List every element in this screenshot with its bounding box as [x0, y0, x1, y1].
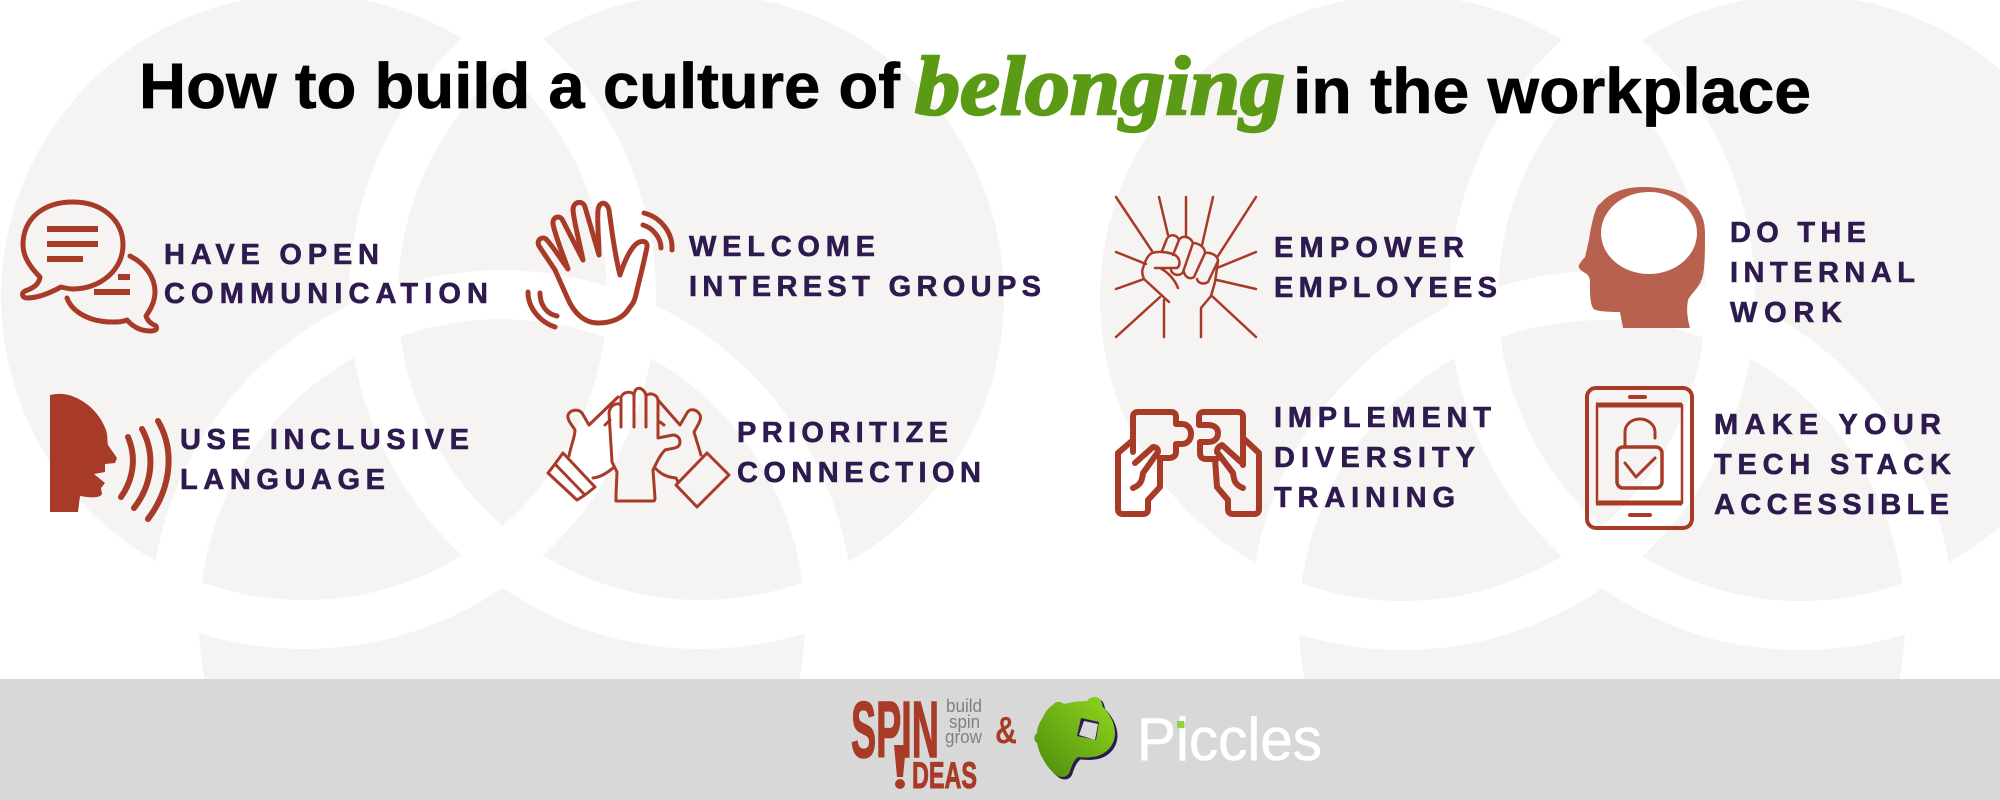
- label: [180, 424, 469, 496]
- label: LANGUAGE: [180, 464, 385, 496]
- icon: raised fist with rays: [1116, 197, 1256, 337]
- icon: speaking head: [50, 394, 169, 519]
- label: [164, 239, 488, 310]
- label: DO THE: [1730, 217, 1866, 249]
- label: INTEREST GROUPS: [689, 271, 1041, 303]
- label: [1730, 217, 1915, 329]
- label: [1714, 409, 1951, 521]
- icon: high five: [548, 388, 729, 507]
- label: USE INCLUSIVE: [180, 424, 469, 456]
- title: [139, 40, 1811, 133]
- item: make your tech stack accessible: [1587, 388, 1951, 528]
- footer band: [0, 679, 2000, 800]
- label: WELCOME: [689, 231, 875, 263]
- logo: Spin Ideas: DEAS: [912, 755, 977, 796]
- label: IMPLEMENT: [1274, 402, 1491, 434]
- item: implement diversity training: [1118, 402, 1491, 514]
- title: belonging: [915, 40, 1285, 133]
- label: [1274, 232, 1497, 304]
- label: [1274, 402, 1491, 514]
- icon: speech bubbles: [23, 202, 157, 331]
- logo: Piccles: [1034, 697, 1322, 779]
- title: How to build a culture of: [139, 50, 901, 122]
- label: TECH STACK: [1714, 449, 1951, 481]
- ampersand: &: [995, 710, 1017, 752]
- logo: Spin Ideas: spin: [949, 712, 980, 732]
- label: MAKE YOUR: [1714, 409, 1941, 441]
- icon: head silhouette: [1579, 187, 1705, 328]
- label: COMMUNICATION: [164, 278, 488, 310]
- label: [689, 231, 1041, 303]
- logo: Spin Ideas: [851, 685, 983, 796]
- icon: tablet with padlock: [1587, 388, 1692, 528]
- label: TRAINING: [1274, 482, 1455, 514]
- label: DIVERSITY: [1274, 442, 1475, 474]
- logo: Piccles: Piccles: [1137, 706, 1322, 773]
- label: WORK: [1730, 297, 1842, 329]
- label: PRIORITIZE: [737, 417, 948, 449]
- item: welcome interest groups: [528, 202, 1041, 327]
- icon: hands holding puzzle pieces: [1118, 412, 1259, 514]
- item: use inclusive language: [50, 394, 469, 519]
- item: do the internal work: [1579, 187, 1915, 329]
- title: in the workplace: [1293, 55, 1811, 127]
- label: CONNECTION: [737, 457, 981, 489]
- label: ACCESSIBLE: [1714, 489, 1949, 521]
- label: INTERNAL: [1730, 257, 1915, 289]
- item: empower employees: [1116, 197, 1497, 337]
- label: EMPOWER: [1274, 232, 1464, 264]
- logo: Spin Ideas: grow: [945, 727, 983, 747]
- icon: waving hand: [528, 202, 672, 327]
- label: [737, 417, 981, 489]
- label: EMPLOYEES: [1274, 272, 1497, 304]
- item: prioritize connection: [548, 388, 981, 507]
- label: HAVE OPEN: [164, 239, 379, 271]
- logo: Spin Ideas: build: [946, 696, 982, 716]
- logo: Spin Ideas: SPIN: [851, 685, 939, 774]
- item: have open communication: [23, 202, 488, 331]
